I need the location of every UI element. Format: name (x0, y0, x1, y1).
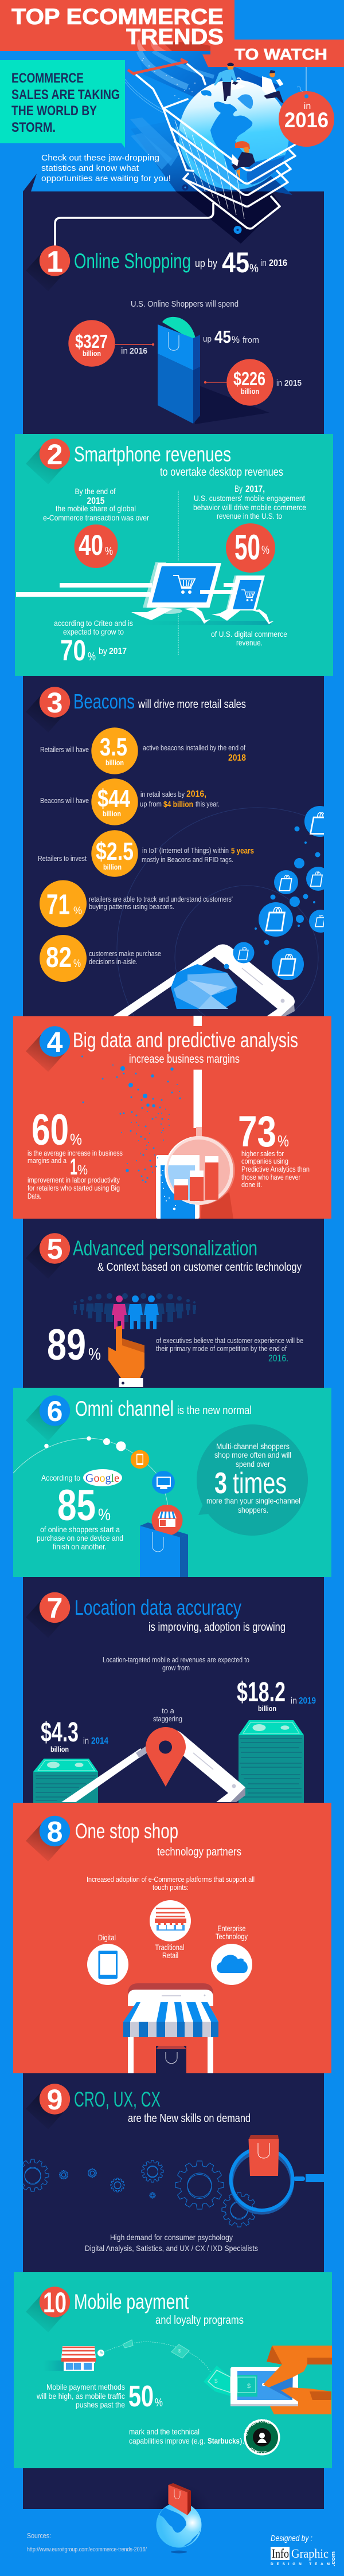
stat 71%: retailers are able to track and understand customers' (89, 895, 233, 903)
number badge 7: 7 (47, 1592, 62, 1624)
number badge 1 (26, 245, 70, 291)
right copy: behavior will drive mobile commerce (193, 503, 306, 512)
navy shopping bag (156, 2046, 186, 2073)
cart wheels (182, 185, 242, 234)
stat $2.5 billion: $2.5 (96, 837, 134, 866)
intro text: opportunities are waiting for you! (41, 174, 171, 183)
shopping cart (55, 64, 295, 246)
50% stat: 50 (234, 528, 260, 567)
number badge 2: 2 (47, 439, 62, 471)
stat 60%: margins and a (28, 1156, 67, 1165)
section 9: CRO UX CX (17, 2084, 324, 2253)
sources: Sources: (27, 2531, 51, 2540)
50% copy: capabilities improve (e.g. (129, 2436, 205, 2445)
google stat: % (98, 1506, 111, 1524)
50% copy: Mobile payment methods (46, 2382, 125, 2391)
designer credit: .com (330, 2551, 336, 2566)
left copy: e-Commerce transaction was over (43, 513, 149, 522)
70% copy: by (99, 647, 107, 656)
40% stat: % (105, 545, 113, 558)
50% copy: mark and the technical (129, 2427, 200, 2436)
50% copy: Starbucks (208, 2436, 240, 2445)
intro callout box: STORM. (11, 120, 56, 135)
designer credit (271, 2534, 336, 2566)
50% copy: 50 (128, 2380, 154, 2413)
tablet with hands: $ (247, 2383, 251, 2390)
speech bubble: 3 (214, 1467, 227, 1500)
stat 60%: % (70, 1130, 82, 1148)
$226 stat: 2015 (284, 378, 302, 388)
man with tablet (262, 70, 284, 104)
heading 1 (74, 246, 287, 279)
stat 73%: companies using (241, 1157, 288, 1165)
stat 3.5 billion: 2018 (228, 753, 246, 763)
heading 4 (73, 1028, 298, 1066)
stat 89%: 89 (47, 1321, 86, 1369)
touch points copy: Increased adoption of e-Commerce platforms that support all (87, 1875, 255, 1884)
up 45% from: % (232, 334, 240, 345)
stat 71% (40, 880, 233, 927)
number badge 8 (26, 1816, 70, 1862)
heading 2 (74, 443, 283, 479)
stat 82%: decisions in-aisle. (89, 957, 138, 966)
icon: enterprise technology (211, 1924, 252, 1985)
70% copy (54, 618, 133, 667)
70% copy: % (88, 651, 96, 663)
$226 stat: $226 (233, 368, 265, 389)
digital commerce copy (211, 629, 287, 647)
google stat: finish on another. (53, 1542, 107, 1551)
$226 stat: in (276, 378, 282, 388)
heading 1: 45 (222, 246, 249, 279)
stat 89%: 2016. (268, 1353, 288, 1364)
stat $44 billion: $4 billion (163, 800, 193, 809)
heading 1: Online Shopping (74, 249, 191, 273)
$327 stat: $327 (75, 331, 108, 352)
number badge 2 (26, 439, 70, 484)
title banner: TRENDS (126, 25, 224, 49)
ad revenue copy: grow from (162, 1663, 190, 1672)
google stat (37, 1469, 123, 1551)
stat $2.5 billion: in IoT (Internet of Things) within (142, 846, 229, 855)
50% copy: ). (240, 2436, 245, 2445)
$327 stat: in (121, 346, 128, 356)
stat 82%: % (73, 958, 81, 970)
stat $18.2: billion (258, 1704, 276, 1713)
$327 stat: billion (83, 350, 101, 358)
stat 89%: their primary mode of competition by the end of (156, 1344, 287, 1353)
$327 stat: 2016 (130, 346, 147, 356)
magnifier with bag (230, 2135, 324, 2213)
skills copy (85, 2233, 258, 2253)
number badge 1: 1 (46, 245, 63, 279)
up 45% from (203, 327, 259, 347)
red bag (169, 2483, 191, 2515)
intro callout box: THE WORLD BY (11, 103, 97, 119)
icon: enterprise technology: Enterprise (218, 1924, 246, 1933)
stat $4.3: in (83, 1736, 89, 1746)
navy central panel (23, 174, 324, 2509)
section 3: beacons (26, 687, 344, 1090)
stat 71%: buying patterns using beacons. (89, 902, 174, 911)
digital commerce copy: of U.S. digital commerce (211, 629, 287, 639)
$226 stat (204, 359, 302, 406)
right copy: U.S. customers' mobile engagement (194, 494, 305, 503)
heading 7: Location data accuracy (75, 1596, 241, 1619)
store and payment arc: $ (178, 2348, 181, 2354)
stat 71%: 71 (46, 888, 70, 921)
intro callout box (0, 60, 125, 148)
heading 2: to overtake desktop revenues (160, 466, 283, 479)
speech bubble: times (233, 1467, 287, 1500)
heading 3 (73, 690, 246, 713)
stat $44 billion: this year. (196, 800, 220, 808)
50% copy: pushes past the (76, 2400, 125, 2409)
section 10: mobile payment (14, 2272, 332, 2468)
stat $2.5 billion: billion (103, 863, 122, 871)
phone storefront (123, 1983, 218, 2073)
tablet with hands: $ (214, 2378, 218, 2385)
heading 3: Beacons (73, 690, 135, 713)
heading 10: and loyalty programs (155, 2314, 244, 2327)
section 6: omni channel (13, 1388, 331, 1577)
50% copy (36, 2380, 245, 2445)
stat 73%: Predictive Analytics than (241, 1165, 310, 1173)
heading 7: is improving, adoption is growing (148, 1621, 286, 1634)
speech bubble (197, 1424, 308, 1536)
stat 89%: % (88, 1345, 101, 1364)
stat $2.5 billion: 5 years (231, 846, 254, 856)
stat 89%: of executives believe that customer experience will be (156, 1336, 303, 1345)
icon: traditional retail: Retail (162, 1951, 178, 1960)
stat 73% (238, 1107, 310, 1189)
50% copy: will be high, as mobile traffic (36, 2391, 125, 2401)
pointing hand (108, 1325, 144, 1387)
right copy (193, 484, 306, 520)
stat 82% (40, 935, 161, 982)
globe (175, 80, 289, 190)
70% copy: according to Criteo and is (54, 618, 133, 628)
heading 5: Advanced personalization (73, 1236, 257, 1260)
section 5: personalization (26, 1233, 303, 1387)
title banner: TO WATCH (234, 45, 327, 63)
ad revenue copy (103, 1655, 249, 1723)
intro text: statistics and know what (41, 164, 139, 173)
heading 5: & Context based on customer centric technology (97, 1261, 302, 1274)
heading 1: 2016 (269, 257, 287, 268)
intro callout box: SALES ARE TAKING (11, 87, 120, 103)
speech bubble: spend over (236, 1459, 270, 1469)
number badge 10: 10 (43, 2287, 67, 2319)
man standing (214, 63, 241, 101)
50% copy: % (155, 2397, 163, 2409)
50% stat: % (261, 544, 269, 557)
ad revenue copy: Location-targeted mobile ad revenues are expected to (103, 1655, 249, 1664)
section 2: smartphone revenues (15, 434, 333, 676)
stat 3.5 billion: 3.5 (100, 733, 127, 761)
up 45% from: up (203, 334, 212, 344)
heading 6: Omni channel (75, 1397, 174, 1420)
badge: in 2016 (279, 67, 334, 147)
icon: enterprise technology: Technology (216, 1932, 248, 1941)
stat 60%: Data. (28, 1192, 41, 1200)
shopping bag with globe (158, 317, 269, 424)
icon: traditional retail (150, 1900, 191, 1960)
40% stat: 40 (79, 529, 103, 561)
stat 73%: % (277, 1132, 289, 1150)
stat 60% (28, 1106, 123, 1200)
stat 82%: 82 (46, 941, 72, 973)
section 4: big data (13, 1016, 331, 1219)
stat $44 billion: up from (140, 800, 162, 808)
70% copy: expected to grow to (63, 627, 124, 636)
subhead: U.S. Online Shoppers will spend (131, 299, 239, 309)
stat 60%: % (77, 1162, 88, 1178)
left copy: By the end of (75, 487, 116, 496)
heading 9 (74, 2088, 251, 2125)
stat $2.5 billion: mostly in Beacons and RFID tags. (142, 855, 233, 864)
right copy: revenue in the U.S. to (217, 511, 282, 520)
section 1: online shopping (26, 245, 302, 424)
stat 60%: for retailers who started using Big (28, 1184, 120, 1192)
phone with location pin (61, 1727, 245, 1802)
stat $44 billion: in retail sales by (140, 790, 185, 798)
digital commerce copy: revenue. (236, 638, 263, 647)
heading 1: in (260, 257, 267, 268)
speech bubble: Multi-channel shoppers (216, 1442, 290, 1451)
left copy (43, 487, 149, 522)
number badge 6 (26, 1395, 70, 1441)
heading 9: are the New skills on demand (128, 2112, 251, 2125)
icon: traditional retail: Traditional (155, 1943, 185, 1952)
cart wires (175, 120, 244, 219)
heading 1: up by (195, 257, 217, 270)
up 45% from: 45 (214, 327, 231, 347)
stat 73%: done it. (241, 1180, 262, 1189)
number badge 9 (26, 2084, 70, 2129)
stat $2.5 billion (38, 830, 254, 877)
$327 stat (68, 320, 154, 367)
intro text (41, 154, 171, 183)
designer credit: Designed by : (271, 2534, 312, 2543)
stat $44 billion: Beacons will have (40, 796, 89, 805)
footer globe with bag (156, 2483, 202, 2553)
up 45% from: from (243, 335, 259, 345)
stat $44 billion: 2016, (186, 789, 206, 799)
sources: http://www.euroitgroup.com/ecommerce-trends-2016/ (27, 2546, 147, 2553)
heading 1: % (249, 262, 259, 275)
heading 5 (73, 1236, 302, 1274)
stat 3.5 billion: billion (105, 758, 124, 767)
scattering data dots (83, 1056, 180, 1209)
heading 10 (74, 2290, 244, 2327)
ad revenue copy: to a (162, 1706, 175, 1715)
stat 60%: 1 (70, 1154, 77, 1180)
heading 7 (75, 1596, 286, 1634)
stat 3.5 billion: active beacons installed by the end of (143, 743, 245, 752)
google logo (83, 1469, 122, 1486)
touch points copy: touch points: (153, 1883, 189, 1892)
stat $4.3 (41, 1717, 108, 1753)
heading 9: CRO, UX, CX (74, 2088, 161, 2111)
intro text: Check out these jaw-dropping (41, 154, 159, 163)
gears (17, 2159, 256, 2227)
icon: digital (87, 1933, 128, 1985)
right copy: 2017, (245, 484, 265, 494)
running devices (16, 562, 274, 625)
google logo: Google (85, 1472, 119, 1485)
stat $44 billion: $44 (97, 785, 130, 813)
badge: in 2016: 2016 (284, 108, 329, 132)
stat $18.2: $18.2 (237, 1677, 286, 1708)
touch points copy (87, 1875, 255, 1892)
badge: in 2016: in (304, 101, 311, 111)
heading 8 (75, 1819, 241, 1858)
section 8: one stop shop (13, 1803, 331, 2073)
designer credit: Graphic (291, 2546, 329, 2561)
number badge 7 (26, 1592, 70, 1638)
stat $4.3: 2014 (91, 1736, 108, 1746)
tablet with hands (204, 2346, 332, 2414)
sources (27, 2531, 147, 2553)
cart handle (128, 59, 187, 75)
number badge 3: 3 (47, 687, 62, 719)
heading 8: One stop shop (75, 1819, 178, 1843)
number badge 5 (26, 1233, 70, 1279)
number badge 4 (26, 1026, 70, 1072)
stat 3.5 billion (40, 727, 246, 774)
number badge 6: 6 (47, 1395, 62, 1427)
google stat: 85 (57, 1481, 96, 1530)
left copy: the mobile share of global (56, 504, 136, 513)
stat 73%: those who have never (241, 1173, 301, 1181)
skills copy: High demand for consumer psychology (110, 2233, 233, 2242)
bag bubbles (233, 806, 324, 980)
speech bubble: shop more often and will (214, 1450, 291, 1459)
heading 3: will drive more retail sales (138, 698, 246, 711)
stat $18.2: in (291, 1696, 297, 1706)
stat $18.2: 2019 (299, 1696, 316, 1706)
40% stat (75, 524, 118, 568)
heading 4: increase business margins (129, 1053, 240, 1066)
heading 6: is the new normal (177, 1404, 252, 1417)
starbucks logo: STARBUCKS (244, 2419, 271, 2436)
device arc (13, 1436, 175, 1508)
store and payment arc (43, 2340, 211, 2373)
skills copy: Digital Analysis, Satistics, and UX / CX / IXD Specialists (85, 2244, 258, 2253)
number badge 10 (26, 2287, 70, 2332)
speech bubble: more than your single-channel (206, 1496, 300, 1505)
title banner: TOP ECOMMERCE (11, 5, 224, 29)
$226 stat: billion (241, 387, 259, 396)
stat 3.5 billion: Retailers will have (40, 745, 89, 754)
location pin (146, 1727, 186, 1787)
magnifier and tablet illustration (156, 1016, 235, 1219)
starbucks logo: COFFEE (250, 2448, 267, 2453)
title banner (0, 0, 344, 67)
crowd of people (73, 1293, 196, 1329)
stat 60%: is the average increase in business (28, 1149, 123, 1157)
heading 10: Mobile payment (74, 2290, 189, 2313)
stat 82%: customers make purchase (89, 949, 161, 958)
number badge 5: 5 (47, 1233, 62, 1265)
stat $44 billion: billion (103, 809, 121, 818)
50% stat (226, 523, 275, 573)
heading 2: Smartphone revenues (74, 443, 231, 466)
intro callout box: ECOMMERCE (11, 71, 84, 86)
stat 89% (47, 1321, 303, 1369)
stat 73%: higher sales for (241, 1149, 284, 1158)
number badge 8: 8 (47, 1816, 62, 1848)
people on globe (214, 63, 284, 179)
stat 71%: % (73, 905, 82, 917)
left copy: 2015 (87, 495, 104, 506)
google stat: According to (41, 1473, 80, 1482)
bag with store (140, 1505, 188, 1577)
speech bubble: shoppers. (238, 1505, 268, 1514)
right copy: By (234, 484, 243, 494)
stat $4.3: billion (50, 1745, 69, 1753)
stat $2.5 billion: Retailers to invest (38, 854, 87, 863)
icon: digital: Digital (98, 1933, 116, 1942)
stat 60%: improvement in labor productivity (28, 1176, 120, 1184)
designer credit: DESIGN TEAM (271, 2562, 330, 2566)
woman with laptop (232, 141, 255, 179)
stat $44 billion (40, 778, 220, 825)
stat $4.3: $4.3 (41, 1717, 79, 1748)
google stat: of online shoppers start a (40, 1525, 120, 1534)
70% copy: 70 (60, 634, 86, 667)
money stacks (33, 1720, 304, 1803)
hero illustration: cart and globe (55, 51, 295, 246)
ad revenue copy: staggering (153, 1714, 182, 1723)
stat 73%: 73 (238, 1107, 276, 1156)
section 7: location data (26, 1592, 316, 1803)
number badge 9: 9 (47, 2084, 62, 2116)
70% copy: 2017 (109, 647, 127, 656)
stat 60%: 60 (32, 1106, 69, 1154)
starbucks logo (244, 2419, 280, 2456)
heading 8: technology partners (157, 1846, 241, 1858)
google stat: purchase on one device and (37, 1533, 123, 1543)
decorative phone and bags (113, 807, 319, 1016)
number badge 3 (26, 687, 70, 733)
number badge 4: 4 (47, 1026, 63, 1058)
designer credit: Info (272, 2546, 289, 2561)
